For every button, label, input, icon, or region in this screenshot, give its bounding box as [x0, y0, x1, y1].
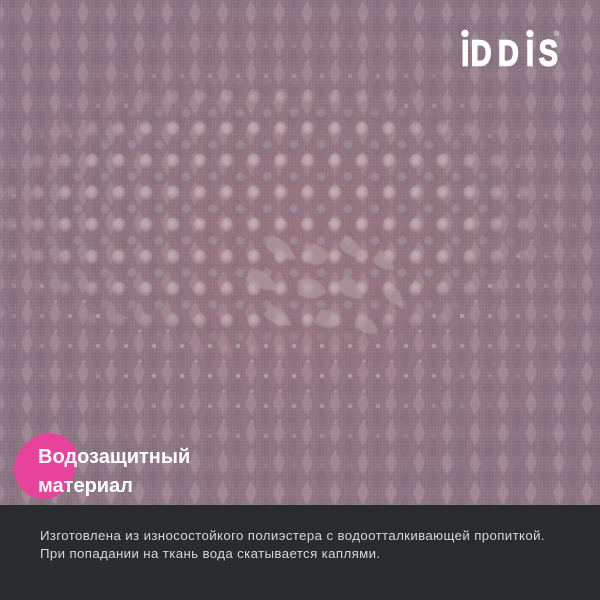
central area of merged droplets [246, 235, 402, 333]
description text: При попадании на ткань вода скатывается каплями. [40, 546, 380, 561]
heading: water-resistant material [38, 446, 190, 496]
heading: water-resistant material: материал [38, 474, 133, 496]
logo: IDDIS: ® [554, 30, 560, 38]
description text: Изготовлена из износостойкого полиэстера с водоотталкивающей пропиткой. [40, 528, 545, 543]
bottom description band [0, 505, 600, 600]
heading: water-resistant material: Водозащитный [38, 446, 190, 468]
logo: IDDIS: IDDIS [461, 32, 558, 73]
description text [40, 528, 545, 561]
pink blob behind heading [14, 433, 78, 499]
